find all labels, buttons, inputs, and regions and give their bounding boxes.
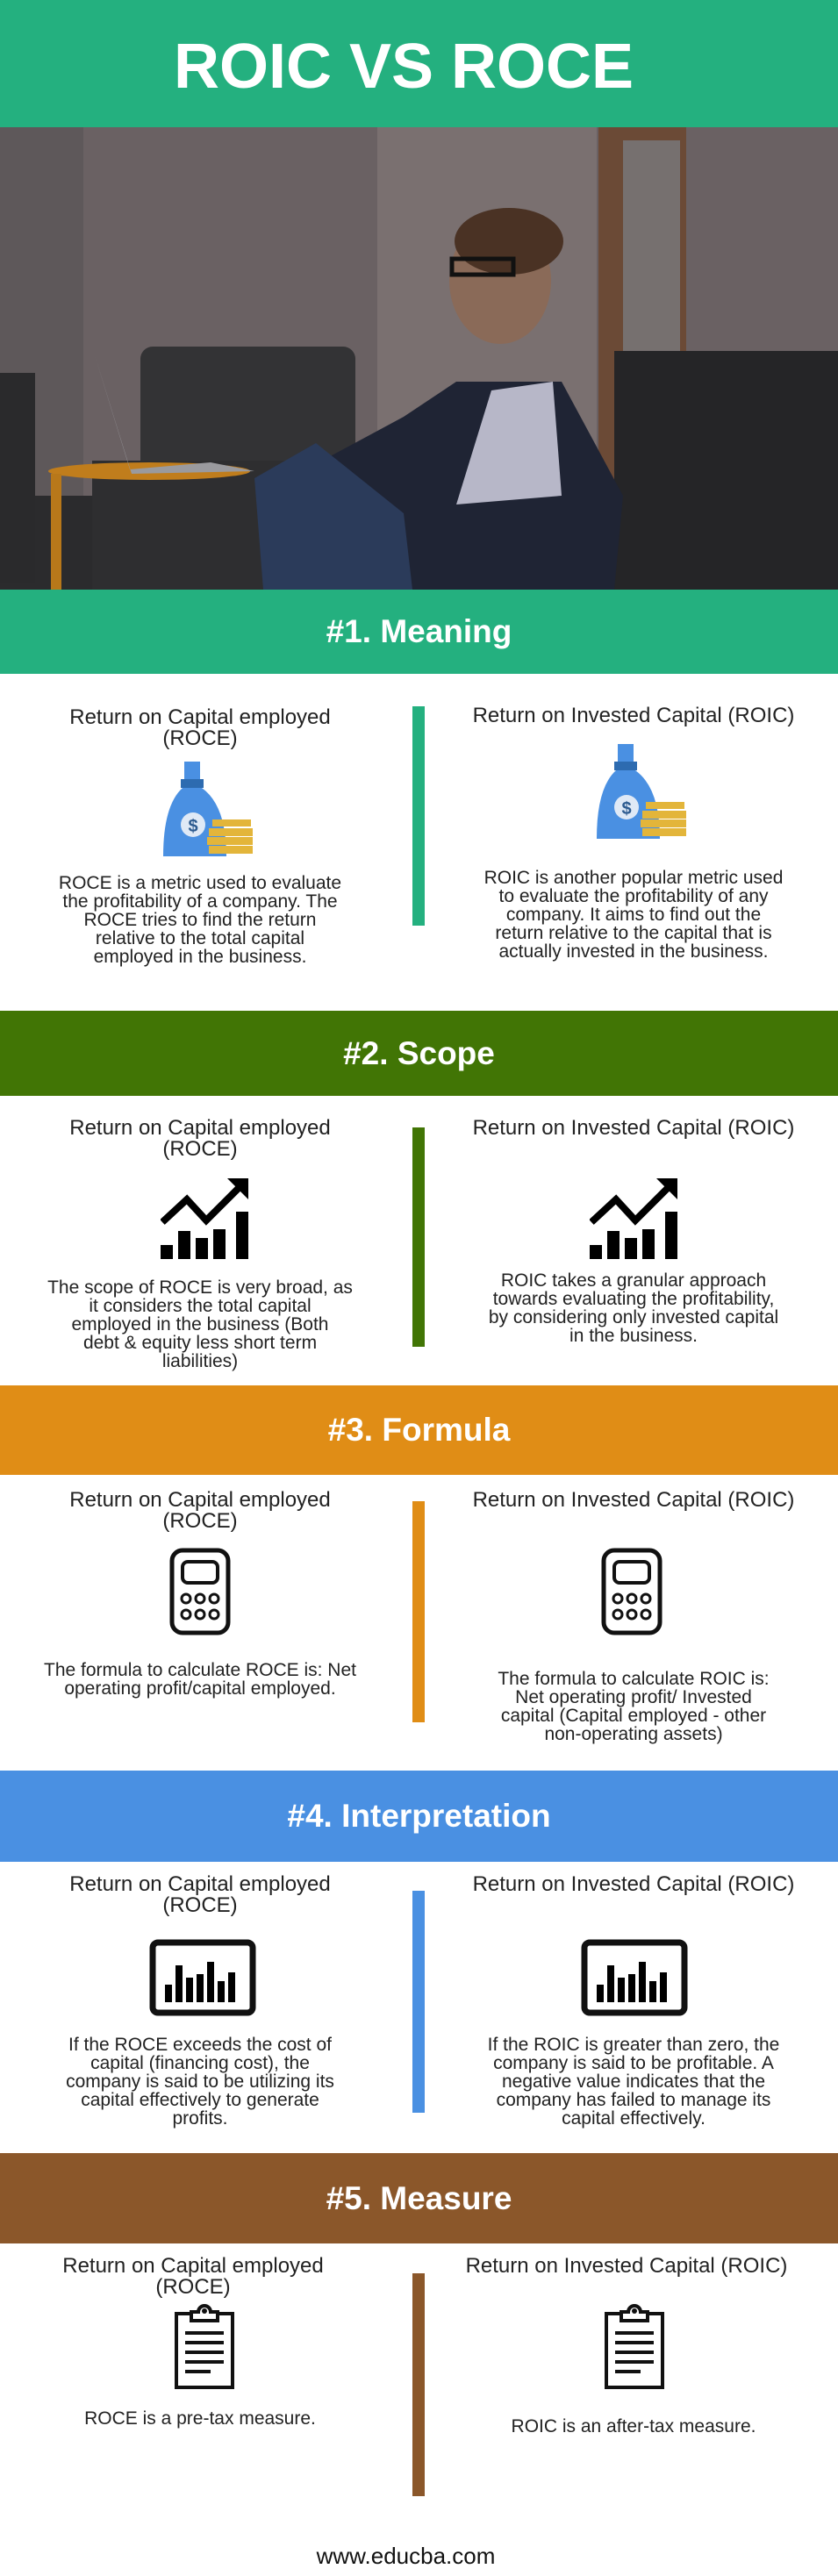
right body: capital effectively.	[562, 2108, 705, 2129]
title band	[0, 0, 838, 127]
right title: Return on Invested Capital (ROIC)	[473, 1488, 794, 1512]
left body: company is said to be utilizing its	[66, 2072, 334, 2092]
left body: If the ROCE exceeds the cost of	[68, 2035, 332, 2055]
header: #4 Interpretation: #4. Interpretation	[287, 1798, 551, 1834]
divider	[412, 1127, 425, 1347]
left body: relative to the total capital	[96, 928, 304, 948]
left body: liabilities)	[162, 1351, 238, 1371]
section 5 content	[62, 2254, 787, 2496]
left title	[69, 1488, 331, 1533]
icon: money bag right	[597, 744, 686, 839]
divider	[412, 706, 425, 926]
left title: Return on Capital employed	[69, 705, 331, 729]
left body: debt & equity less short term	[83, 1333, 317, 1353]
icon: bar chart screen left	[149, 1939, 256, 2016]
section 4 content	[66, 1872, 794, 2129]
right body: ROIC is another popular metric used	[484, 868, 783, 888]
header: #3 Formula	[0, 1385, 838, 1475]
left body	[59, 873, 341, 967]
right body: return relative to the capital that is	[495, 923, 772, 943]
left title	[62, 2254, 324, 2299]
left title: (ROCE)	[162, 726, 238, 750]
left title: (ROCE)	[162, 1137, 238, 1161]
left body: capital (financing cost), the	[90, 2053, 310, 2073]
header: #4 Interpretation	[0, 1771, 838, 1862]
left body	[44, 1660, 356, 1699]
divider	[412, 2273, 425, 2496]
right body: capital (Capital employed - other	[501, 1706, 766, 1726]
icon: clipboard left	[175, 2304, 234, 2389]
right body: Net operating profit/ Invested	[515, 1687, 752, 1707]
left body	[66, 2035, 334, 2129]
right body: towards evaluating the profitability,	[493, 1289, 774, 1309]
icon: growth chart right	[590, 1178, 677, 1259]
header: #5 Measure	[0, 2153, 838, 2243]
divider	[412, 1891, 425, 2113]
right title: Return on Invested Capital (ROIC)	[473, 704, 794, 727]
footer: www.educba.com	[317, 2543, 495, 2569]
right title: Return on Invested Capital (ROIC)	[473, 1116, 794, 1140]
icon: clipboard right	[605, 2304, 664, 2389]
left title	[69, 1116, 331, 1161]
photo: man with laptop on sofa	[0, 127, 838, 590]
header: #1 Meaning: #1. Meaning	[326, 613, 512, 649]
left title: Return on Capital employed	[69, 1872, 331, 1896]
left body: operating profit/capital employed.	[64, 1678, 336, 1699]
right title: Return on Invested Capital (ROIC)	[473, 1872, 794, 1896]
left body: ROCE tries to find the return	[84, 910, 316, 930]
icon: calculator left	[170, 1548, 230, 1635]
divider	[412, 1501, 425, 1722]
right body: ROIC is an after-tax measure.	[512, 2416, 756, 2436]
header: #3 Formula: #3. Formula	[328, 1412, 510, 1448]
right body: If the ROIC is greater than zero, the	[488, 2035, 779, 2055]
right body: company has failed to manage its	[497, 2090, 770, 2110]
left title: (ROCE)	[162, 1509, 238, 1533]
right body: company is said to be profitable. A	[493, 2053, 774, 2073]
header: #2 Scope	[0, 1011, 838, 1096]
icon: calculator right	[602, 1548, 662, 1635]
right body: non-operating assets)	[544, 1724, 723, 1744]
left body: employed in the business.	[94, 947, 306, 967]
right body: to evaluate the profitability of any	[498, 886, 769, 906]
right body	[498, 1669, 770, 1744]
right body	[488, 2035, 779, 2129]
left body: it considers the total capital	[89, 1296, 312, 1316]
right body: by considering only invested capital	[489, 1307, 778, 1327]
right body: in the business.	[569, 1326, 698, 1346]
left title	[69, 705, 331, 750]
left title: Return on Capital employed	[62, 2254, 324, 2278]
left body: the profitability of a company. The	[62, 891, 338, 912]
left title	[69, 1872, 331, 1917]
left body: profits.	[172, 2108, 228, 2129]
left body	[47, 1277, 353, 1371]
right body	[484, 868, 783, 962]
section 2 content	[47, 1116, 794, 1371]
icon: money bag left: $	[188, 817, 198, 836]
left body: The formula to calculate ROCE is: Net	[44, 1660, 356, 1680]
right body: actually invested in the business.	[498, 941, 769, 962]
icon: money bag right: $	[621, 799, 632, 819]
left title: (ROCE)	[162, 1893, 238, 1917]
right body: The formula to calculate ROIC is:	[498, 1669, 770, 1689]
left body: ROCE is a pre-tax measure.	[84, 2408, 316, 2429]
right title: Return on Invested Capital (ROIC)	[466, 2254, 787, 2278]
left title: (ROCE)	[155, 2275, 231, 2299]
left body: employed in the business (Both	[71, 1314, 328, 1335]
left title: Return on Capital employed	[69, 1116, 331, 1140]
left body: The scope of ROCE is very broad, as	[47, 1277, 353, 1298]
header: #2 Scope: #2. Scope	[343, 1035, 495, 1071]
left body: ROCE is a metric used to evaluate	[59, 873, 341, 893]
section 1 content	[59, 704, 794, 967]
section 3 content	[44, 1488, 794, 1744]
icon: bar chart screen right	[581, 1939, 688, 2016]
right body: company. It aims to find out the	[506, 905, 761, 925]
left body: capital effectively to generate	[81, 2090, 319, 2110]
right body: negative value indicates that the	[502, 2072, 765, 2092]
icon: money bag left	[163, 762, 253, 856]
left title: Return on Capital employed	[69, 1488, 331, 1512]
header: #1 Meaning	[0, 590, 838, 674]
header: #5 Measure: #5. Measure	[326, 2180, 512, 2216]
right body: ROIC takes a granular approach	[501, 1270, 766, 1291]
right body	[489, 1270, 778, 1346]
icon: growth chart left	[161, 1178, 248, 1259]
title: ROIC VS ROCE	[174, 32, 634, 102]
